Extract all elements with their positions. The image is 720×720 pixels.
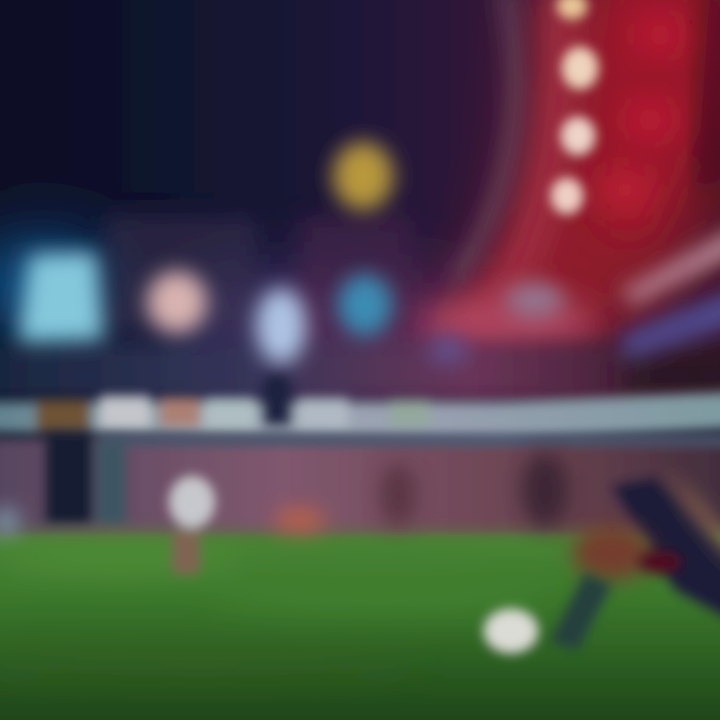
pitch xyxy=(0,534,720,720)
red stadium arc xyxy=(420,0,720,351)
stadium lights xyxy=(551,0,598,214)
badge: yellow xyxy=(333,142,393,210)
dark pillars xyxy=(46,375,290,525)
light ad band xyxy=(0,392,720,440)
badge: light blue xyxy=(18,252,104,342)
right stand stripes xyxy=(625,350,720,400)
distant glows xyxy=(0,452,569,536)
player: left xyxy=(169,476,215,574)
team badges xyxy=(18,142,565,364)
crowd stand xyxy=(0,438,720,543)
badge: white blue xyxy=(256,288,306,364)
player: right striker xyxy=(550,470,720,650)
blue glow left xyxy=(0,240,520,380)
badge: faint xyxy=(505,282,565,318)
badge: blue xyxy=(338,274,392,336)
background sky xyxy=(0,0,720,400)
faint scoreboard panels xyxy=(105,215,410,335)
lower tier band xyxy=(0,342,720,400)
football xyxy=(484,609,538,653)
badge: pink white xyxy=(147,271,207,333)
